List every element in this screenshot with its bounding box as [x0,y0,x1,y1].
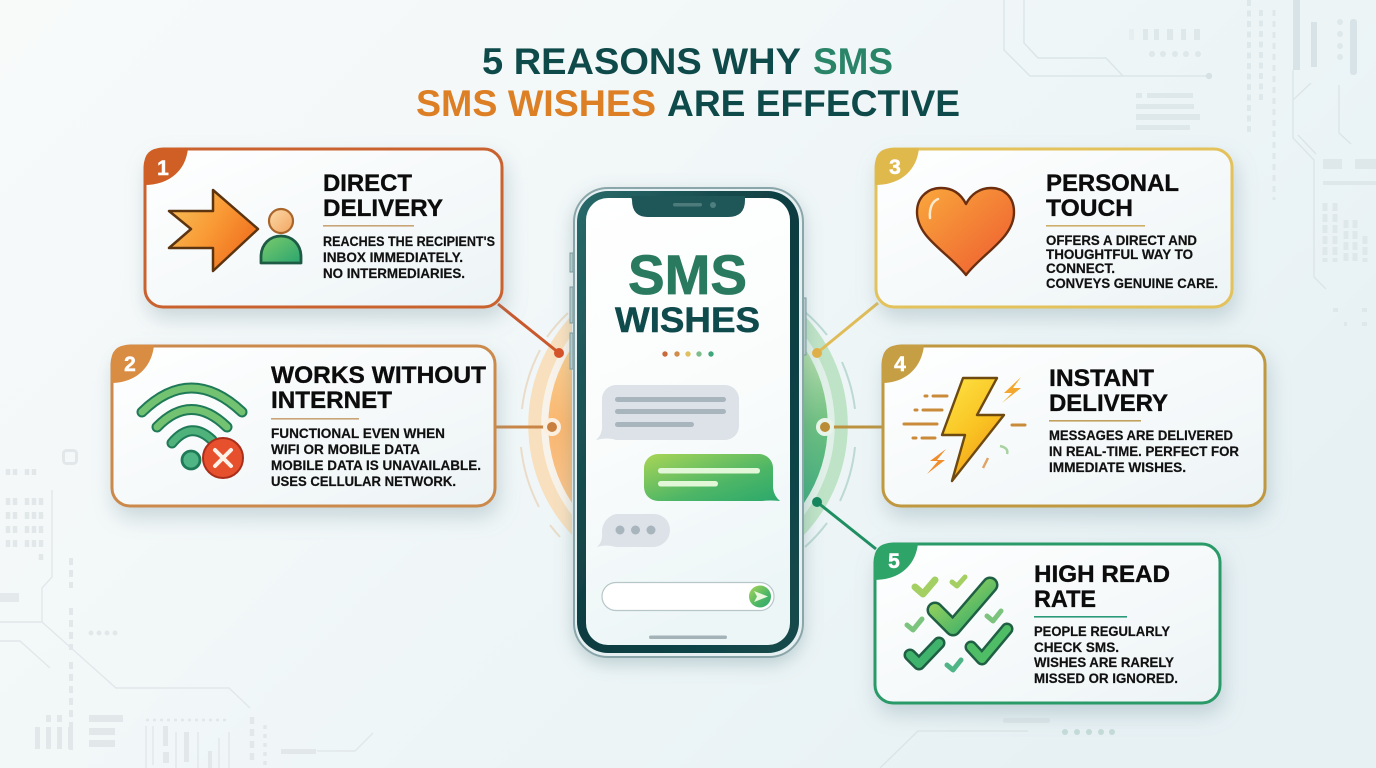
phone screen [586,198,790,645]
text: high read rate: PEOPLE REGULARLY [1034,624,1170,639]
text: direct delivery: REACHES THE RECIPIENT'S [323,234,495,249]
phone heading [615,243,760,340]
text: high read rate [1034,561,1178,686]
text: high read rate: RATE [1034,586,1096,613]
text: instant delivery: INSTANT [1049,365,1154,392]
text: personal touch: CONNECT. [1046,261,1115,276]
panel: high read rate [874,543,1220,703]
text: personal touch: PERSONAL [1046,170,1179,197]
text: works without internet: WORKS WITHOUT [271,362,486,389]
text: direct delivery: DELIVERY [323,195,443,222]
text: instant delivery: IN REAL-TIME. PERFECT FOR [1049,444,1239,459]
text: high read rate: CHECK SMS. [1034,640,1119,655]
icon: lightning bolt [904,377,1025,481]
icon: arrow to person [169,190,301,271]
title: 5 REASONS WHY [482,41,801,82]
text: personal touch: OFFERS A DIRECT AND [1046,233,1197,248]
title: SMS [813,41,893,82]
icon: heart [917,188,1014,275]
badge 3: 3 [889,156,901,179]
text: direct delivery: INBOX IMMEDIATELY. [323,250,463,265]
badge 3 [875,148,919,185]
text: works without internet: INTERNET [271,387,392,414]
text: instant delivery: DELIVERY [1049,390,1168,417]
phone notch [631,196,745,217]
text: works without internet [271,362,486,489]
text: direct delivery: DIRECT [323,170,412,197]
phone side buttons [570,253,806,369]
phone heading: WISHES [615,301,760,340]
panel: instant delivery [882,345,1265,506]
title: SMS WISHES [416,83,656,124]
text: personal touch [1046,170,1218,291]
text: high read rate: WISHES ARE RARELY [1034,655,1174,670]
badge 4: 4 [894,353,906,376]
panel: works without internet [111,345,495,506]
text: direct delivery: NO INTERMEDIARIES. [323,266,465,281]
outgoing bubble [644,454,780,501]
icon: check marks [907,577,1007,670]
panel: personal touch [875,148,1232,307]
text: personal touch: THOUGHTFUL WAY TO [1046,247,1193,262]
badge 5: 5 [888,550,900,573]
phone body [574,188,803,657]
signal halo: left orange [521,313,572,537]
incoming bubble [596,385,739,440]
text: instant delivery: IMMEDIATE WISHES. [1049,460,1186,475]
text: high read rate: MISSED OR IGNORED. [1034,671,1178,686]
text: works without internet: USES CELLULAR NETWORK. [271,474,456,489]
icon: wifi off [142,388,243,478]
connector 4 [816,418,882,436]
badge 1: 1 [157,157,169,180]
connector 1 [498,304,564,358]
badge 2 [111,345,154,383]
badge 1 [144,148,188,185]
central phone [570,188,806,657]
typing bubble [597,514,670,547]
colour dots [662,351,714,357]
text: direct delivery [323,170,495,281]
text: instant delivery [1049,365,1239,475]
text: personal touch: TOUCH [1046,195,1133,222]
phone heading: SMS [628,243,747,306]
home bar [649,636,727,639]
connector 5 [812,497,876,549]
text: personal touch: CONVEYS GENUINE CARE. [1046,276,1218,291]
input field with send button [602,582,774,610]
connector 2 [496,418,561,436]
title: ARE EFFECTIVE [667,83,960,124]
title [416,41,960,124]
text: works without internet: MOBILE DATA IS UNAVAILABLE. [271,458,481,473]
badge 2: 2 [124,353,136,376]
text: works without internet: WIFI OR MOBILE DATA [271,442,420,457]
text: works without internet: FUNCTIONAL EVEN WHEN [271,426,445,441]
signal halo: right green [804,312,855,547]
badge 4 [882,345,924,383]
text: high read rate: HIGH READ [1034,561,1170,588]
text: instant delivery: MESSAGES ARE DELIVERED [1049,428,1233,443]
panel: direct delivery [144,148,502,307]
connector 3 [812,303,878,358]
badge 5 [874,543,918,580]
